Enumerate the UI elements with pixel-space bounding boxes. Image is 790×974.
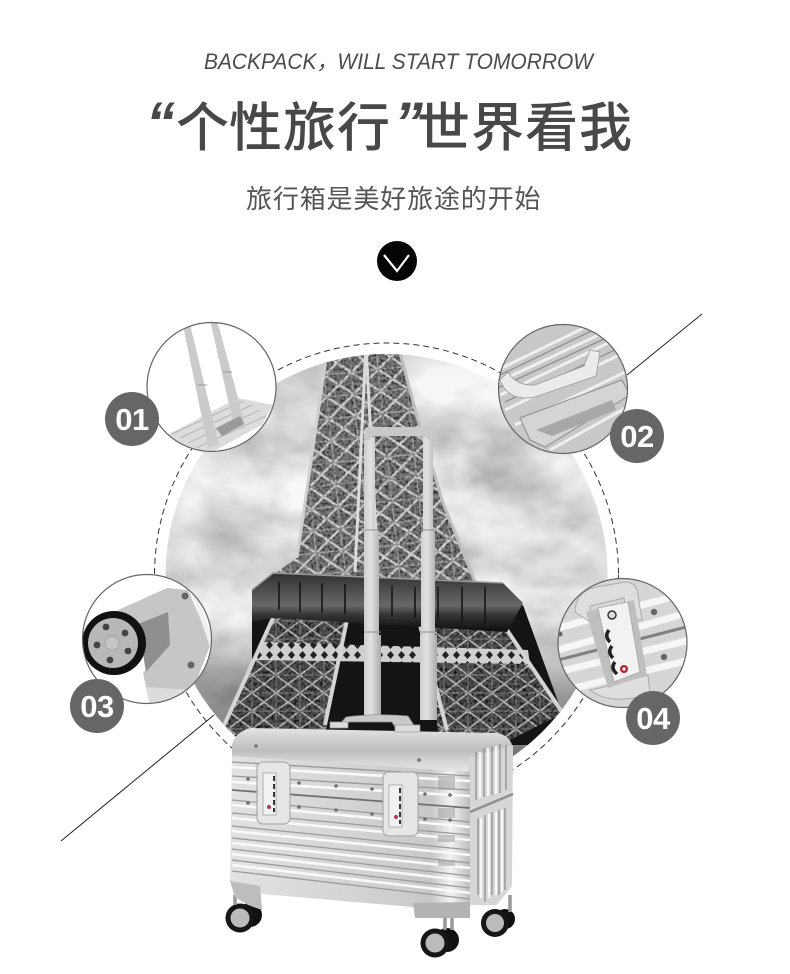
tower platform [252, 573, 523, 632]
title: ” [394, 91, 423, 156]
dashed ring [154, 343, 618, 807]
tagline chinese: 旅行箱是美好旅途的开始 [246, 184, 541, 214]
badge 03 [70, 679, 124, 733]
detail 04: combination lock [558, 578, 690, 708]
top carry handle [330, 715, 420, 732]
tower upper section [276, 354, 476, 581]
front ribs [232, 762, 470, 899]
badge 02 [610, 409, 664, 463]
detail 03: spinner wheel [82, 574, 212, 710]
detail 01: trolley rails [146, 320, 276, 456]
title: 世界看我 [417, 99, 632, 158]
detail 02: side handle [498, 320, 640, 454]
tower lower section [222, 604, 562, 745]
bottom corner guards [230, 881, 262, 910]
badge 03: 03 [80, 689, 114, 724]
badge 01: 01 [115, 402, 149, 437]
badge 02: 02 [620, 419, 654, 454]
cloudy sky [160, 350, 615, 800]
rivets [246, 744, 452, 822]
panel: eiffel tower photo [166, 354, 608, 772]
diagonal line bottom left [61, 715, 214, 841]
corner reflection [438, 776, 455, 866]
right lock [383, 772, 418, 836]
lid [232, 728, 513, 772]
diagonal line top right [627, 314, 702, 375]
subtitle: english tagline: BACKPACK，WILL START TOMORROW [204, 49, 595, 74]
telescopic trolley handle [364, 427, 437, 720]
left lock [257, 762, 290, 824]
front panel [230, 756, 470, 907]
badge 04 [626, 691, 680, 745]
badge 01 [105, 392, 159, 446]
suitcase [226, 715, 515, 958]
title: “ [146, 91, 175, 156]
badge 04: 04 [636, 701, 671, 736]
icon: chevron down [377, 241, 417, 281]
title: 个性旅行 [176, 99, 390, 158]
wheels [226, 893, 515, 958]
side panel [468, 744, 513, 905]
